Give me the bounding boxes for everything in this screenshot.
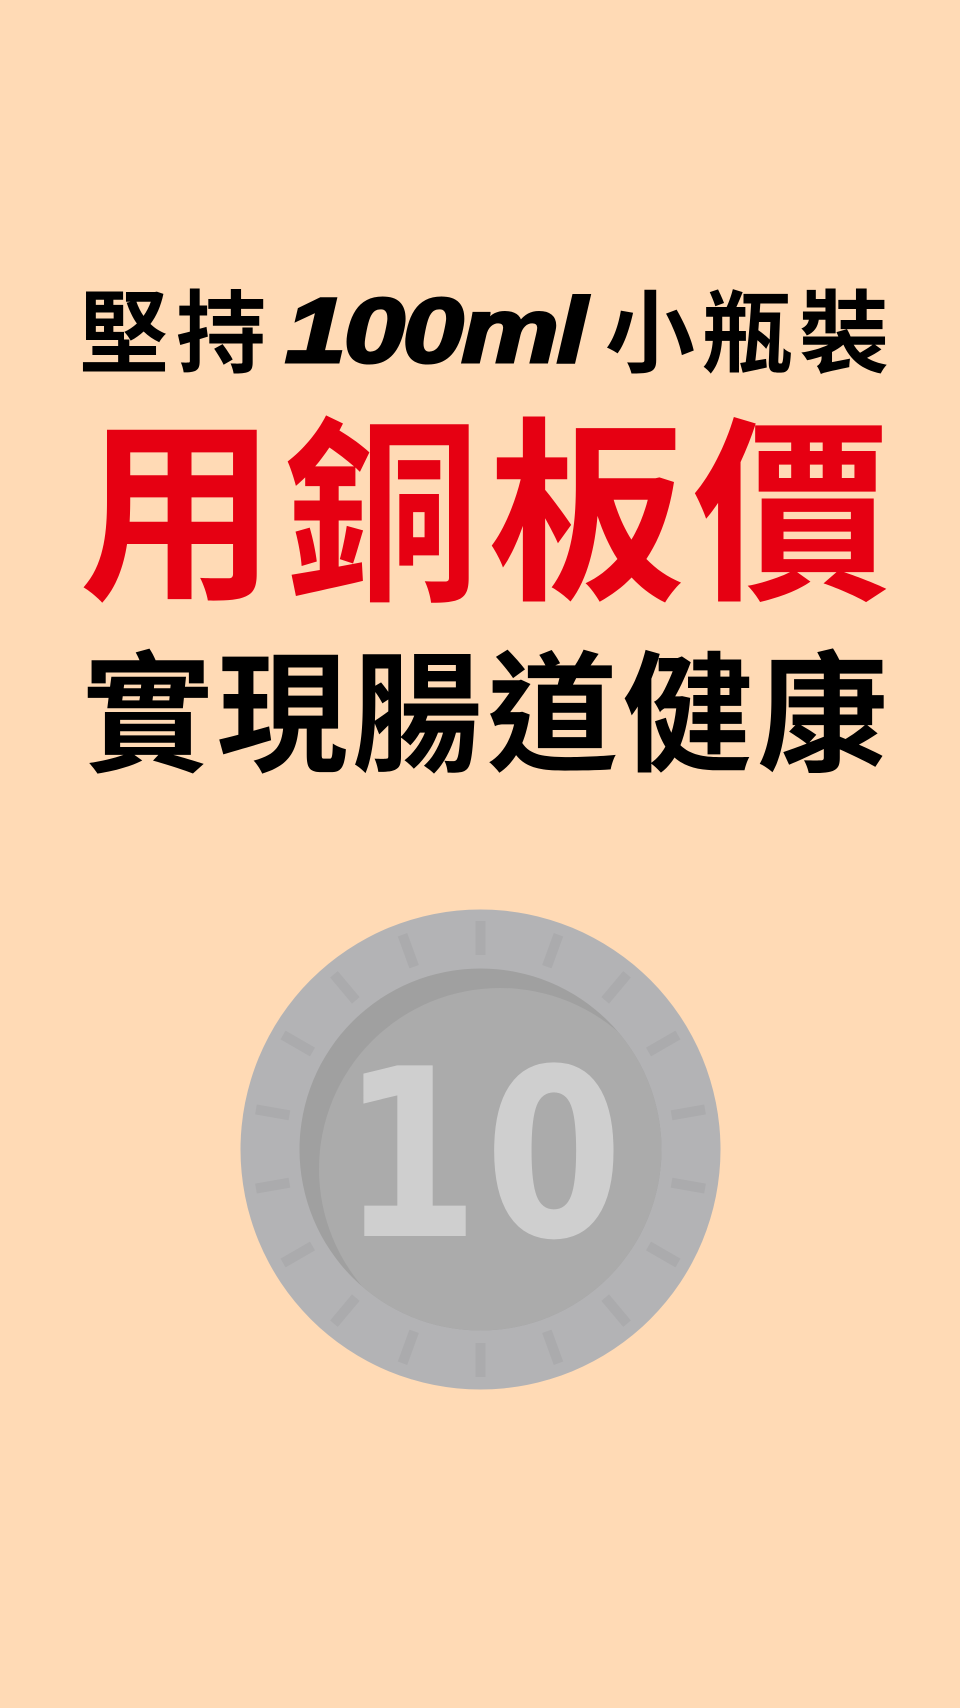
heading line 3: 實現腸道健康 [82, 642, 892, 789]
coin rim ticks [255, 921, 706, 1377]
heading line 2: red emphasis: 用銅板價 [79, 406, 897, 626]
heading line 1: 堅持 [79, 285, 273, 385]
coin outer disc [240, 910, 720, 1390]
icon: 10 dollar coin [240, 910, 720, 1390]
heading line 1: 100ml [285, 280, 585, 382]
coin recessed centre shadow [300, 968, 662, 1330]
heading line 1: 小瓶裝 [605, 285, 896, 385]
coin centre face [319, 988, 662, 1330]
title block [79, 280, 897, 789]
coin value: 10: 10 [341, 1019, 623, 1292]
heading line 1 [79, 280, 896, 385]
